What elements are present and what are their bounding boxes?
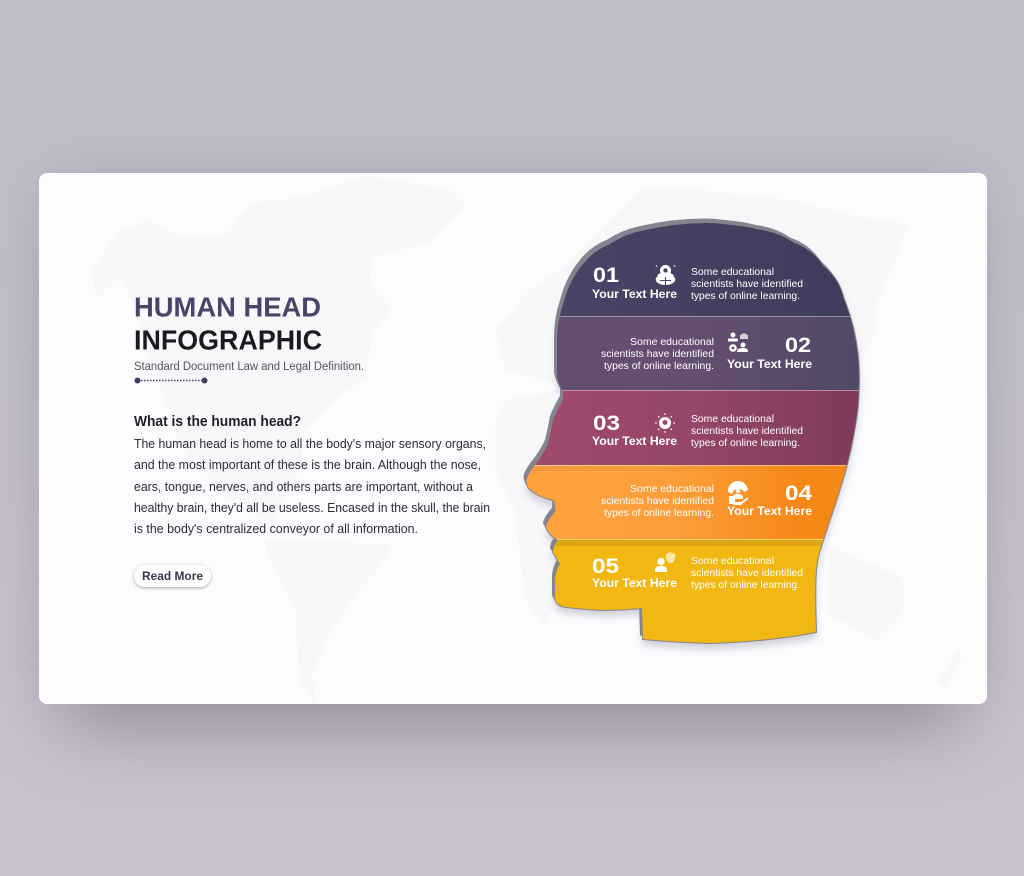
item 03 [592,412,803,449]
band separators [510,316,870,540]
title line 2: INFOGRAPHIC [134,324,322,356]
number 03: 03 [593,412,620,435]
band 3 [510,390,870,465]
description 05: Some educational [691,555,774,567]
body paragraph: healthy brain, they'd all be useless. Encased in the skull, the brain [134,501,490,515]
body heading: What is the human head? [134,414,301,430]
item 04 [601,481,812,519]
icon: people and gear [728,332,748,352]
head infographic [526,223,859,643]
body paragraph: is the body's centralized conveyor of all information. [134,522,418,536]
description 03: Some educational [691,413,774,425]
read more button [134,565,211,587]
label 01: Your Text Here [592,287,677,301]
band 4 top shade [531,466,672,471]
number 01: 01 [593,264,619,287]
number 04: 04 [785,482,812,505]
body paragraph: ears, tongue, nerves, and others parts are important, without a [134,480,473,494]
description 01: scientists have identified [691,278,803,290]
number 05: 05 [592,555,619,578]
description 01: Some educational [691,266,774,278]
description 01 [691,266,803,302]
dotted divider [134,378,208,384]
description 02: scientists have identified [601,348,714,360]
world map background [62,175,962,704]
icon: person and shield [655,552,675,572]
icon: gear person hand [728,481,748,505]
description 03: types of online learning. [691,437,800,449]
label 04: Your Text Here [727,504,812,518]
description 01: types of online learning. [691,290,800,302]
number 02: 02 [785,334,811,357]
icon: brain gear [656,265,675,285]
label 02: Your Text Here [727,357,812,371]
band 5 [553,539,824,643]
card shadow [60,200,965,725]
description 05: scientists have identified [691,567,803,579]
band 1 [560,223,850,316]
text block: what is the human head [134,414,490,536]
description 05 [691,555,803,591]
head outline edge [524,219,859,643]
description 05: types of online learning. [691,579,800,591]
read more button: Read More [142,569,203,583]
label 03: Your Text Here [592,434,677,448]
head shadow [527,229,859,649]
band 2 [557,316,859,390]
description 02: types of online learning. [604,360,714,372]
item 05 [592,552,803,591]
title line 1: HUMAN HEAD [134,292,321,322]
item 01 [592,264,803,302]
label 05: Your Text Here [592,576,677,590]
subtitle: Standard Document Law and Legal Definition. [134,361,364,373]
description 04: types of online learning. [604,507,714,519]
description 02 [601,336,714,372]
description 03 [691,413,803,449]
title [134,292,322,356]
band 5 top shade [554,540,823,546]
description 03: scientists have identified [691,425,803,437]
description 04: scientists have identified [601,495,714,507]
description 02: Some educational [630,336,714,348]
icon: head bulb [655,413,675,433]
body paragraph: and the most important of these is the brain. Although the nose, [134,458,481,472]
band 4 [526,465,847,539]
panel: white card [39,173,987,704]
body paragraph [134,437,490,536]
description 04 [601,483,714,519]
description 04: Some educational [630,483,714,495]
body paragraph: The human head is home to all the body's major sensory organs, [134,437,486,451]
item 02 [601,332,812,372]
